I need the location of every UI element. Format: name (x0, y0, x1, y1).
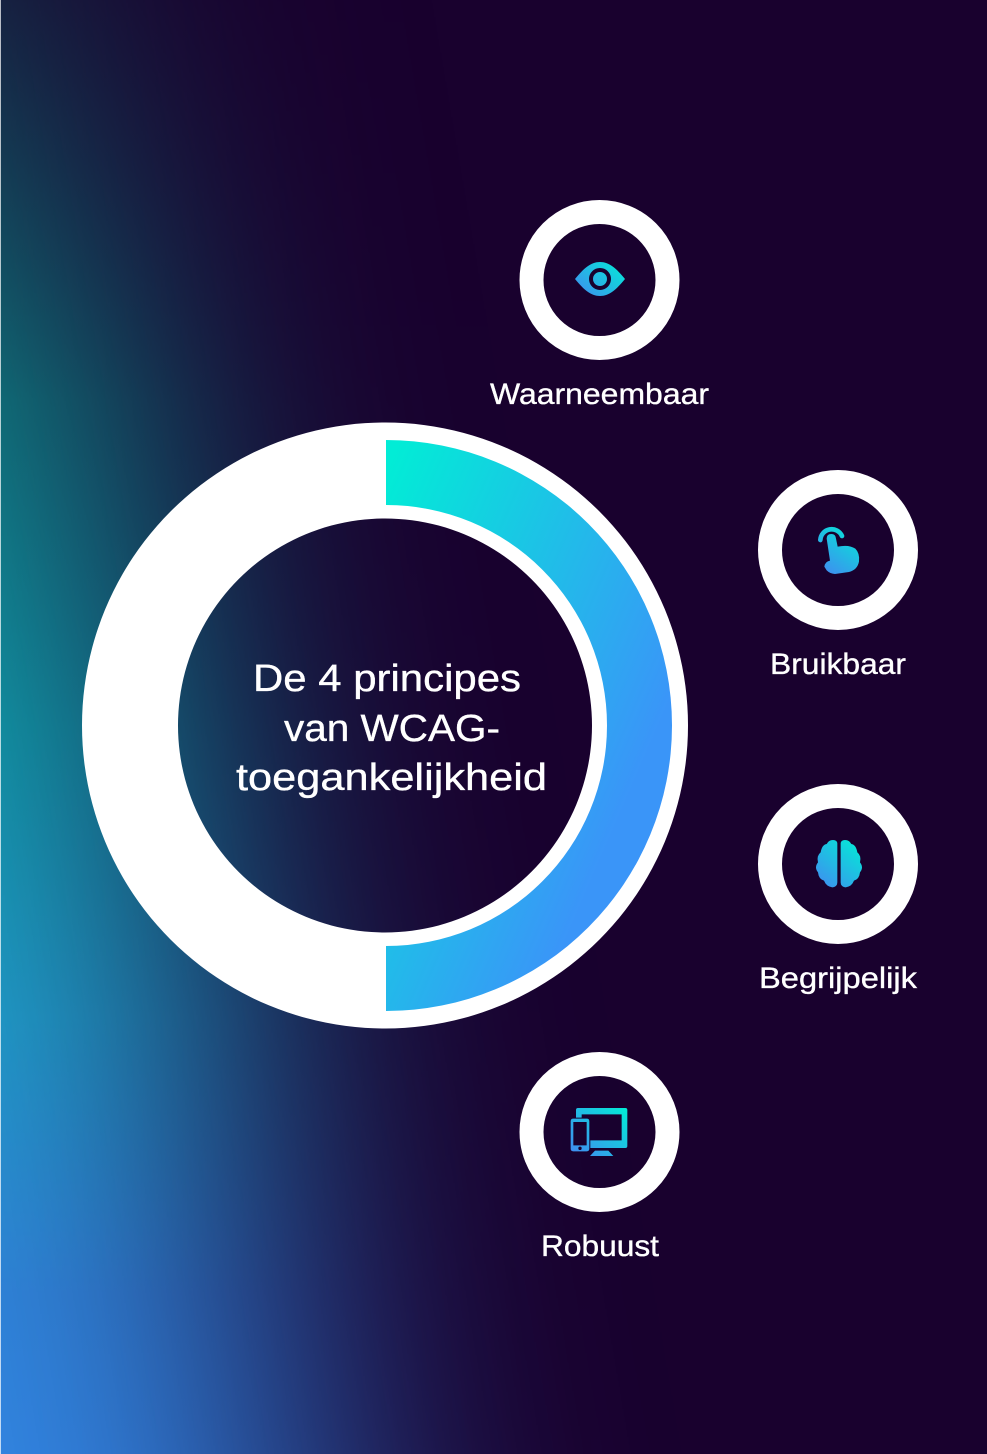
label: Waarneembaar (490, 378, 709, 411)
icon: touch hand (820, 529, 859, 574)
white ring (82, 422, 688, 1029)
title: toegankelijkheid (236, 757, 547, 799)
principle: Robuust (532, 1064, 668, 1263)
icon: devices (571, 1108, 627, 1156)
principle: Bruikbaar (770, 482, 906, 681)
principle: Begrijpelijk (759, 796, 918, 995)
ring (770, 796, 906, 932)
title: De 4 principes (253, 658, 521, 700)
title: van WCAG- (284, 708, 500, 750)
icon: brain (816, 840, 862, 887)
icon: eye (575, 262, 625, 296)
blue half arc (386, 440, 672, 1011)
label: Robuust (541, 1230, 660, 1263)
ring (532, 212, 668, 348)
ring (532, 1064, 668, 1200)
background gradient (0, 0, 543, 1454)
title (236, 658, 547, 799)
label: Begrijpelijk (759, 962, 918, 995)
ring (770, 482, 906, 618)
label: Bruikbaar (770, 648, 906, 681)
central donut chart (82, 422, 688, 1029)
principle: Waarneembaar (490, 212, 709, 411)
